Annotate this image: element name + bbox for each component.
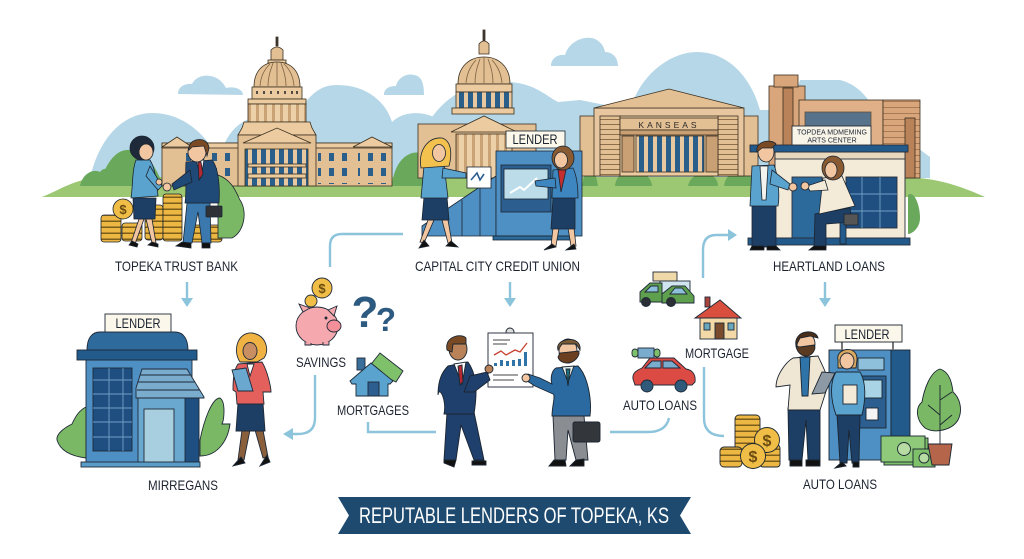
coin stacks: [101, 194, 222, 242]
coin pile: [720, 415, 780, 468]
capital city kiosk scene: [419, 131, 582, 250]
seated woman: [801, 156, 858, 250]
background bushes: [80, 150, 920, 234]
icon: question marks: ?: [352, 288, 378, 337]
icon: house with money: [350, 353, 403, 396]
kiosk: [829, 350, 891, 460]
label: mortgages: MORTGAGES: [337, 402, 409, 418]
icon: green truck: [640, 272, 694, 306]
man in light blue jacket: [750, 141, 797, 250]
kiosk: [496, 151, 582, 236]
label: auto loans right: AUTO LOANS: [803, 476, 877, 492]
label: auto loans middle: AUTO LOANS: [623, 397, 697, 413]
lender sign: LENDER: [512, 131, 558, 147]
panel: mirregans lender bank: [57, 314, 271, 467]
coin pile: $: [749, 449, 758, 466]
arts center storefront: [748, 126, 910, 245]
woman in teal jacket: [129, 136, 162, 247]
lender sign: LENDER: [116, 315, 160, 331]
label: capital city credit union: CAPITAL CITY CREDIT UNION: [415, 258, 580, 274]
paper note: [467, 167, 491, 188]
icon: house: [695, 297, 741, 339]
cash stack: [881, 436, 935, 467]
capitol building left: [162, 37, 392, 186]
icon: piggy bank with coins: [296, 278, 341, 345]
arts center storefront: ARTS CENTER: [807, 138, 857, 144]
label: savings: SAVINGS: [296, 354, 346, 370]
people: topeka trust bank: [101, 136, 244, 248]
title banner: REPUTABLE LENDERS OF TOPEKA, KS: [359, 503, 669, 528]
man in navy suit: [156, 140, 222, 248]
label: heartland loans: HEARTLAND LOANS: [773, 258, 885, 274]
coin stacks: $: [119, 202, 127, 217]
hall sign text: KANSEAS: [638, 120, 700, 130]
round bush: [218, 175, 244, 238]
brown haired woman: [535, 146, 578, 250]
label: topeka trust bank: TOPEKA TRUST BANK: [115, 258, 239, 274]
center: advisors with chart: [438, 328, 600, 467]
icon: piggy bank with coins: $: [318, 281, 326, 296]
skyline hills: [90, 52, 930, 178]
arts center sign text: TOPDEA MDMEMING: [797, 130, 867, 136]
heartland loans people: [750, 141, 858, 250]
bushes: [57, 407, 86, 458]
icon: question marks: ?: [376, 301, 396, 338]
woman with tablet: [232, 333, 271, 466]
man with glasses: [438, 336, 493, 467]
icon: question marks: [352, 288, 396, 338]
arts center building: [769, 75, 920, 178]
capitol building center: [418, 30, 536, 178]
bearded man in cream coat: [776, 332, 835, 466]
lender sign: LENDER: [844, 326, 890, 342]
ramp: [422, 176, 496, 236]
icon: red car: [632, 348, 695, 392]
bearded man: [522, 339, 600, 466]
label: mortgage: MORTGAGE: [685, 345, 749, 361]
arrows: [181, 229, 831, 440]
kansas hall building: [580, 89, 758, 176]
coin pile: $: [763, 433, 772, 450]
blonde woman: [419, 138, 466, 248]
green ground band: [42, 177, 985, 197]
chart board: [488, 328, 533, 387]
title banner: [338, 497, 691, 534]
woman in blue jacket: [832, 349, 865, 468]
clouds: [178, 38, 618, 95]
panel: right lender scene: [720, 325, 960, 468]
potted plant: [917, 369, 960, 465]
label: mirregans: MIRREGANS: [148, 477, 218, 493]
